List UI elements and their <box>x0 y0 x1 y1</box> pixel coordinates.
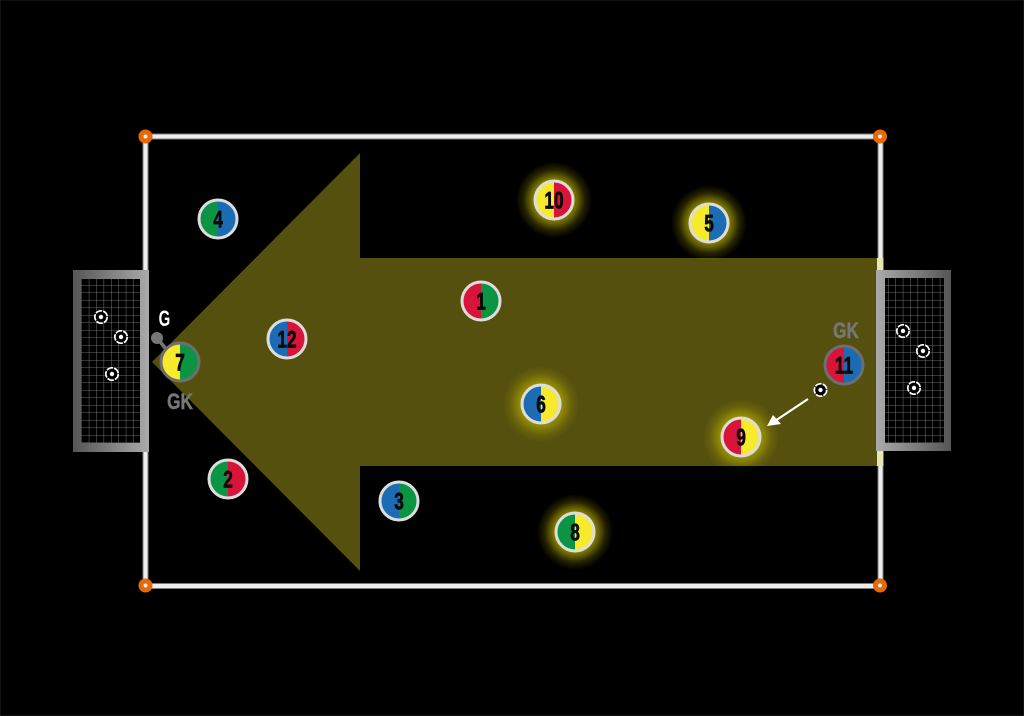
player 8: 8 <box>570 520 580 546</box>
player 10 <box>535 181 573 219</box>
player 11: 11 <box>835 353 853 379</box>
player 5: 5 <box>704 211 714 237</box>
player 10: 10 <box>544 188 564 214</box>
player 9 <box>722 418 760 456</box>
player 1: 1 <box>476 289 486 315</box>
player 6 <box>522 385 560 423</box>
right goal <box>876 270 951 451</box>
player 8 <box>556 513 594 551</box>
player 4: 4 <box>213 207 223 233</box>
player 4 <box>199 200 237 238</box>
player 2: 2 <box>223 467 233 493</box>
left goal <box>73 270 149 452</box>
player 12: 12 <box>277 327 297 353</box>
label GK left: GK <box>167 390 194 415</box>
arrow overlap fix <box>700 466 784 478</box>
player 7: 7 <box>175 350 185 376</box>
pass arrow <box>767 399 808 426</box>
label GK right: GK <box>833 319 860 344</box>
glow halos <box>503 162 779 570</box>
goalkeeper pole G: G <box>159 306 170 331</box>
player 5 <box>690 204 728 242</box>
direction arrow <box>152 153 884 571</box>
player 3: 3 <box>394 489 404 515</box>
match ball <box>814 384 827 396</box>
player 7 <box>161 343 199 381</box>
pitch boundary <box>146 136 883 586</box>
player 2 <box>209 460 247 498</box>
player 11 <box>825 346 863 384</box>
player 12 <box>268 320 306 358</box>
player 3 <box>380 482 418 520</box>
player 6: 6 <box>536 392 546 418</box>
player 9: 9 <box>736 425 746 451</box>
corner markers <box>141 132 884 590</box>
goalkeeper pole G <box>151 306 170 354</box>
player 1 <box>462 282 500 320</box>
